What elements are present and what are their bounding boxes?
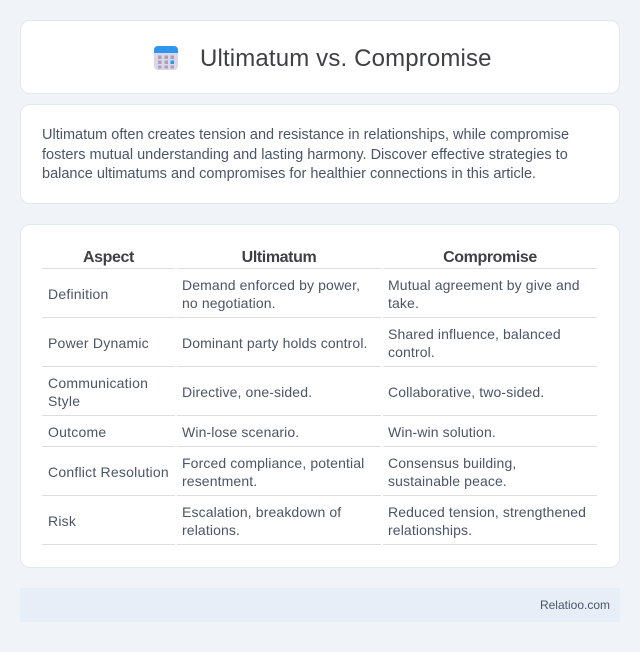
row: outcome: Outcome <box>48 424 106 440</box>
row: outcome <box>48 424 496 440</box>
intro paragraph: balance ultimatums and compromises for healthier connections in this article. <box>42 166 536 182</box>
row: conflict resolution: Consensus building, <box>388 455 516 471</box>
row: risk: Escalation, breakdown of <box>182 504 341 520</box>
intro paragraph: fosters mutual understanding and lasting harmony. Discover effective strategies to <box>42 146 568 162</box>
row: communication style: Style <box>48 393 80 409</box>
intro paragraph <box>42 127 569 182</box>
row: communication style: Directive, one-sided. <box>182 384 312 400</box>
row: conflict resolution: sustainable peace. <box>388 473 507 489</box>
row: outcome: Win-lose scenario. <box>182 424 299 440</box>
row: definition: Mutual agreement by give and <box>388 277 580 293</box>
row: definition: Demand enforced by power, <box>182 277 360 293</box>
row: outcome: Win-win solution. <box>388 424 496 440</box>
row: risk: relations. <box>182 522 240 538</box>
table header: Compromise <box>443 249 537 266</box>
title: Ultimatum vs. Compromise <box>200 45 492 72</box>
row: power dynamic: control. <box>388 344 435 360</box>
row: definition: take. <box>388 295 419 311</box>
panel: intro text <box>20 104 620 204</box>
row: risk: Reduced tension, strengthened <box>388 504 586 520</box>
row: risk <box>48 504 586 538</box>
panel: comparison table <box>20 224 620 568</box>
row: definition: Definition <box>48 286 109 302</box>
icon: calendar <box>154 46 178 70</box>
row: power dynamic: Dominant party holds control. <box>182 335 368 351</box>
table header: Aspect <box>83 249 134 266</box>
row: risk: relationships. <box>388 522 472 538</box>
row: communication style: Collaborative, two-sided. <box>388 384 544 400</box>
row: conflict resolution: resentment. <box>182 473 257 489</box>
row: definition <box>48 277 580 311</box>
row: conflict resolution: Forced compliance, potential <box>182 455 364 471</box>
row: risk: Risk <box>48 513 76 529</box>
row: communication style: Communication <box>48 375 148 391</box>
row: definition: no negotiation. <box>182 295 276 311</box>
row: communication style <box>48 375 544 409</box>
row: power dynamic: Power Dynamic <box>48 335 149 351</box>
row: conflict resolution: Conflict Resolution <box>48 464 169 480</box>
row: power dynamic: Shared influence, balanced <box>388 326 561 342</box>
panel: title card <box>20 20 620 94</box>
table header <box>83 249 537 266</box>
footer brand: Relatioo.com <box>540 598 610 612</box>
footer bar <box>20 588 620 622</box>
row: conflict resolution <box>48 455 516 489</box>
intro paragraph: Ultimatum often creates tension and resistance in relationships, while compromise <box>42 127 569 143</box>
row: power dynamic <box>48 326 561 360</box>
table header: Ultimatum <box>242 249 316 266</box>
